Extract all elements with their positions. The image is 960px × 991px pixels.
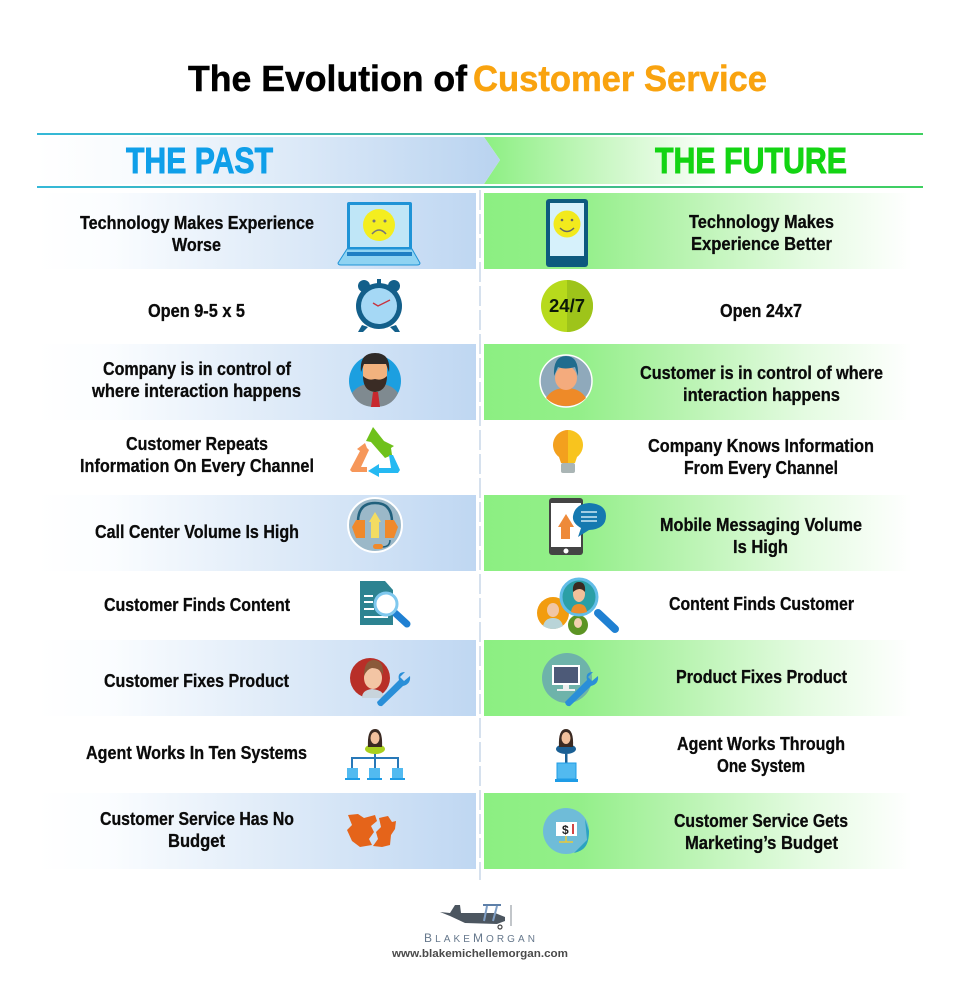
icon: content finds customer — [537, 579, 615, 635]
text: future row 3: Customer is in control of where — [640, 363, 883, 383]
text: brand name: B LAKE M ORGAN — [424, 931, 535, 945]
text: future row 8: One System — [717, 756, 805, 776]
text: future row 5 — [660, 515, 862, 557]
icon: monitor with wrench — [542, 653, 598, 706]
text: future row 4 — [648, 436, 874, 478]
icon: call center headset — [348, 498, 402, 552]
panel: past column rows — [37, 193, 476, 869]
text: past row 6: Customer Finds Content — [104, 595, 290, 615]
icon: businessman avatar — [349, 353, 401, 407]
icon: 24/7 clock: 24/7 — [549, 296, 585, 316]
panel: past header arrow — [37, 137, 500, 184]
icon: 24/7 clock — [541, 280, 593, 332]
footer logo — [391, 904, 568, 960]
text: future row 9 — [674, 811, 848, 853]
text: past row 3: where interaction happens — [91, 381, 301, 401]
icon: customer with wrench — [350, 658, 410, 706]
text: past row 1 — [80, 213, 314, 255]
text: past row 4: Customer Repeats — [126, 434, 268, 454]
text: past row 3: Company is in control of — [103, 359, 292, 379]
text: future row 1: Experience Better — [691, 234, 832, 254]
text: future row 4: From Every Channel — [684, 458, 838, 478]
text: past row 2: Open 9-5 x 5 — [148, 301, 245, 321]
icon: document search — [360, 581, 407, 625]
panel: future header arrow — [484, 137, 720, 184]
text: past row 1: Technology Makes Experience — [80, 213, 314, 233]
text: future row 8: Agent Works Through — [677, 734, 845, 754]
icon: marketing budget — [543, 808, 589, 854]
icon: alarm clock — [356, 279, 402, 332]
text: future row 8 — [677, 734, 845, 776]
text: future row 4: Company Knows Information — [648, 436, 874, 456]
text: past row 7: Customer Fixes Product — [104, 671, 289, 691]
header band — [37, 133, 923, 188]
icon: agent with one system — [555, 729, 578, 782]
icon: mobile messaging — [549, 498, 606, 555]
text: past row 5: Call Center Volume Is High — [95, 522, 299, 542]
icon: customer avatar — [540, 355, 592, 407]
icon: sad laptop — [338, 202, 420, 265]
text: past row 9: Customer Service Has No — [100, 809, 294, 829]
text: past row 4 — [80, 434, 314, 476]
text: future row 5: Is High — [733, 537, 788, 557]
icon: biplane — [440, 904, 511, 929]
text: past row 8: Agent Works In Ten Systems — [86, 743, 307, 763]
text: future row 1: Technology Makes — [689, 212, 834, 232]
text: past row 3 — [91, 359, 301, 401]
text: future row 3 — [640, 363, 883, 405]
text: future row 2: Open 24x7 — [720, 301, 802, 321]
text: future row 5: Mobile Messaging Volume — [660, 515, 862, 535]
heading: the future: THE FUTURE — [655, 140, 847, 181]
icon: recycling arrows — [350, 427, 400, 477]
title — [188, 58, 767, 99]
title: Customer Service — [473, 58, 767, 99]
text: past row 9 — [100, 809, 294, 851]
text: past row 4: Information On Every Channel — [80, 456, 314, 476]
icon: agent with ten systems — [345, 729, 405, 780]
text: future row 9: Customer Service Gets — [674, 811, 848, 831]
text: past row 9: Budget — [168, 831, 225, 851]
text: future row 9: Marketing’s Budget — [685, 833, 838, 853]
icon: broken piggy bank — [347, 814, 396, 847]
title: The Evolution of — [188, 58, 468, 99]
center dashed divider — [479, 190, 481, 880]
icon: happy phone — [546, 199, 588, 267]
text: website: www.blakemichellemorgan.com — [391, 948, 568, 960]
panel: future column rows — [484, 193, 912, 869]
text: past row 1: Worse — [172, 235, 221, 255]
icon: light bulb — [553, 430, 583, 473]
heading: the past: THE PAST — [126, 140, 273, 181]
icon: marketing budget: $ — [562, 823, 569, 837]
text: future row 3: interaction happens — [683, 385, 840, 405]
text: future row 6: Content Finds Customer — [669, 594, 854, 614]
text: future row 7: Product Fixes Product — [676, 667, 847, 687]
text: future row 1 — [689, 212, 834, 254]
